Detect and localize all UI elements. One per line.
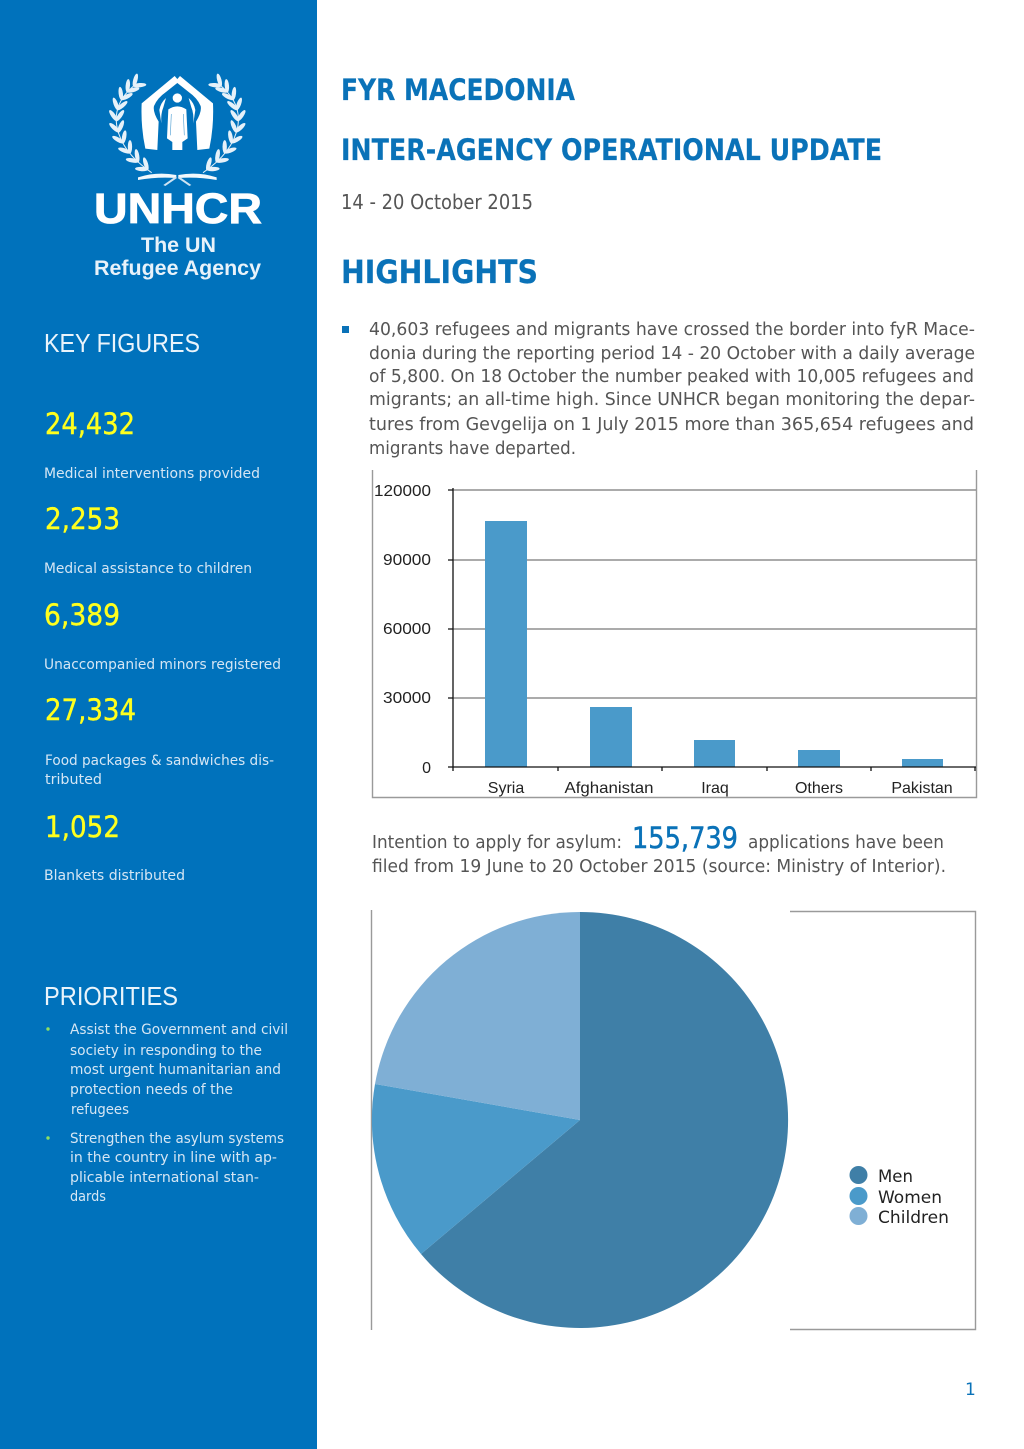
page number: 1 (965, 1380, 976, 1400)
highlights text: of 5,800. On 18 October the number peaked with 10,005 refugees and (369, 366, 974, 387)
asylum applications statement (372, 821, 946, 877)
asylum applications statement: filed from 19 June to 20 October 2015 (source: Ministry of Interior). (372, 856, 946, 877)
key figure: medical assistance to children: 2,253 (45, 502, 120, 536)
priority list: in the country in line with ap- (70, 1150, 277, 1166)
y-axis labels: 0 (422, 760, 431, 777)
bars (485, 521, 943, 767)
y-axis labels (374, 483, 431, 777)
logo: UNHCR emblem and wordmark (94, 71, 262, 280)
asylum applications statement: 155,739 (632, 821, 738, 855)
priority list: protection needs of the (70, 1082, 233, 1098)
x-axis labels: Others (795, 780, 843, 797)
legend (850, 1166, 949, 1228)
x-axis labels: Afghanistan (564, 780, 654, 797)
priority list: refugees (71, 1102, 129, 1118)
asylum applications statement: Intention to apply for asylum: (372, 832, 622, 853)
key figure: medical interventions: 24,432 (45, 407, 135, 441)
x-axis labels: Syria (488, 780, 524, 797)
highlights text: 40,603 refugees and migrants have crossed the border into fyR Mace- (369, 319, 975, 340)
key figure: medical interventions: Medical interventions provided (44, 466, 260, 482)
highlights text: tures from Gevgelija on 1 July 2015 more than 365,654 refugees and (369, 414, 974, 435)
legend: Women (878, 1188, 942, 1208)
key figure: food packages: 27,334 (45, 693, 136, 727)
y-axis labels: 30000 (383, 690, 431, 707)
logo: UNHCR emblem and wordmark: The UN (141, 234, 216, 257)
x-axis labels: Pakistan (891, 780, 953, 797)
legend: Men (878, 1167, 913, 1187)
bar chart: arrivals by country (372, 470, 976, 798)
key figure: unaccompanied minors: 6,389 (44, 598, 120, 632)
key figure: medical assistance to children (44, 502, 252, 577)
icon: hands sheltering a person with laurel wreath (107, 71, 247, 186)
priority list: Strengthen the asylum systems (70, 1131, 284, 1147)
key figure: food packages: Food packages & sandwiches dis- (45, 753, 274, 769)
heading: highlights: HIGHLIGHTS (341, 253, 538, 291)
date: 14 - 20 October 2015 (341, 190, 533, 214)
priority list: dards (70, 1189, 106, 1205)
key figure: blankets: Blankets distributed (44, 868, 185, 884)
y-axis labels: 90000 (383, 552, 431, 569)
key figure: medical assistance to children: Medical assistance to children (44, 561, 252, 577)
highlights text (342, 319, 975, 459)
key figure: food packages (45, 693, 274, 788)
y-axis labels: 120000 (374, 483, 431, 500)
priority list: Assist the Government and civil (70, 1022, 288, 1038)
priority list: plicable international stan- (70, 1170, 259, 1186)
slice: men (421, 912, 788, 1328)
key figure: unaccompanied minors: Unaccompanied minors registered (44, 657, 281, 673)
slice: women (372, 1084, 580, 1254)
y-axis labels: 60000 (383, 621, 431, 638)
key figure: food packages: tributed (45, 772, 102, 788)
heading: key figures: KEY FIGURES (44, 328, 200, 358)
pie chart: men, women, children (372, 910, 976, 1330)
highlights text: donia during the reporting period 14 - 20 October with a daily average (369, 343, 975, 364)
slice: children (375, 912, 580, 1120)
key figure: blankets: 1,052 (45, 810, 120, 844)
x-axis labels (488, 780, 953, 797)
asylum applications statement: applications have been (748, 832, 944, 853)
logo: UNHCR emblem and wordmark: UNHCR (94, 185, 262, 233)
highlights text: migrants have departed. (369, 438, 576, 459)
title: FYR MACEDONIA (341, 73, 575, 107)
axes (448, 488, 976, 771)
key figure: blankets (44, 810, 185, 884)
legend: Children (878, 1208, 949, 1228)
priority list: most urgent humanitarian and (70, 1062, 281, 1078)
x-axis labels: Iraq (701, 780, 729, 797)
key figure: medical interventions (44, 407, 260, 482)
key figure: unaccompanied minors (44, 598, 281, 673)
priority list: society in responding to the (70, 1043, 262, 1059)
priority list (46, 1022, 288, 1205)
title (341, 73, 882, 167)
highlights text: migrants; an all-time high. Since UNHCR began monitoring the depar- (369, 389, 975, 410)
heading: priorities: PRIORITIES (44, 981, 178, 1011)
logo: UNHCR emblem and wordmark: Refugee Agency (94, 257, 261, 280)
title: INTER-AGENCY OPERATIONAL UPDATE (341, 133, 882, 167)
panel: blue sidebar (0, 0, 317, 1449)
